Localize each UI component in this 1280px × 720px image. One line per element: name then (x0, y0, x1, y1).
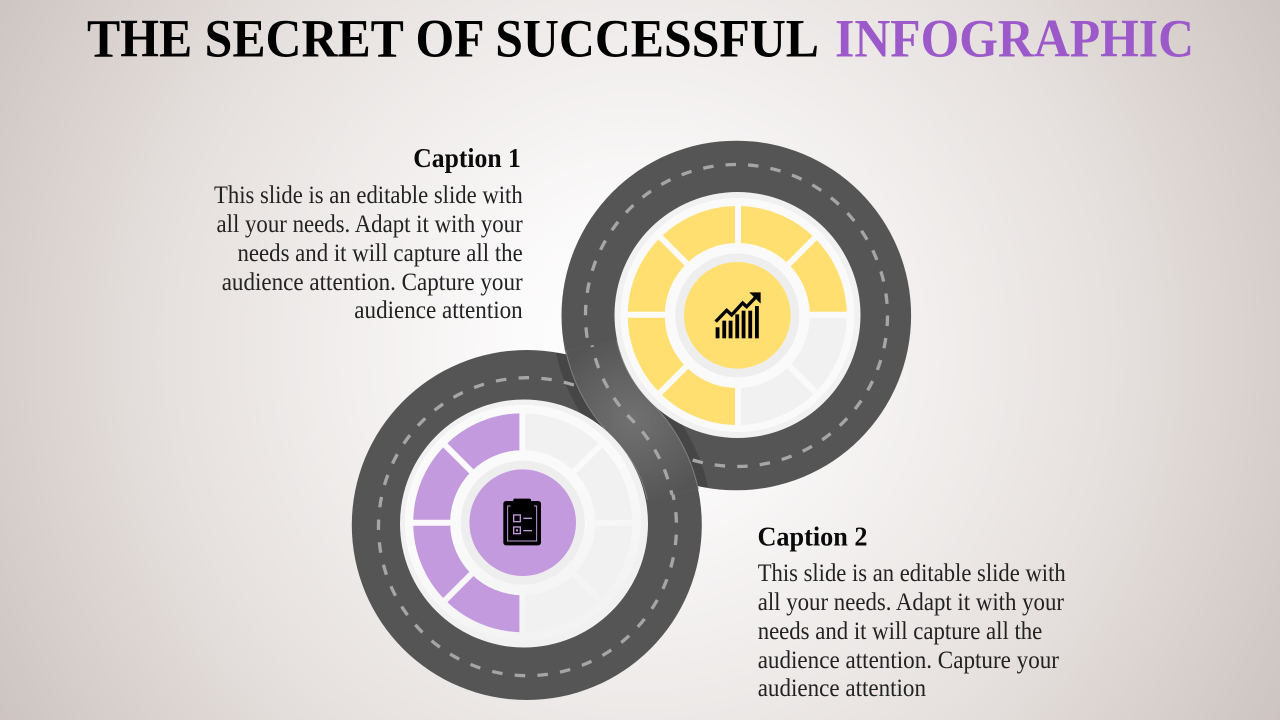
caption 1 heading: Caption 1 (413, 143, 521, 173)
empty segments (504, 413, 655, 655)
caption 1 body: audience attention (354, 297, 523, 324)
top disc (614, 192, 860, 438)
caption 1 body: audience attention. Capture your (222, 269, 523, 296)
empty segments (719, 316, 847, 448)
caption 2 body: audience attention (758, 675, 926, 702)
caption 1 text block (214, 143, 523, 324)
panel: bottom gauge (391, 391, 655, 655)
caption 2 body: audience attention. Capture your (758, 647, 1060, 674)
yellow segments (605, 183, 869, 425)
purple segments (391, 391, 541, 632)
top ring lane dashes (586, 164, 888, 466)
S connector lane dashes (592, 345, 672, 495)
panel: top gauge (605, 183, 869, 448)
bottom road ring (352, 350, 702, 700)
caption 2 body: This slide is an editable slide with (758, 560, 1066, 587)
bottom ring lane dashes (378, 378, 676, 676)
caption 2 body: all your needs. Adapt it with your (758, 589, 1065, 616)
caption 2 heading: Caption 2 (758, 522, 868, 552)
icon: clipboard checklist (503, 499, 541, 545)
caption 1 body: needs and it will capture all the (238, 240, 523, 267)
caption 1 body: all your needs. Adapt it with your (216, 211, 523, 238)
caption 1 body: This slide is an editable slide with (214, 182, 523, 209)
S connector road (591, 346, 673, 494)
S connector road edge (591, 346, 673, 494)
caption 2 body: needs and it will capture all the (758, 618, 1042, 645)
caption 2 text block (758, 522, 1066, 702)
title: INFOGRAPHIC (835, 8, 1194, 68)
top road ring (562, 141, 911, 490)
caption 1 body (214, 182, 523, 324)
yellow hub (684, 262, 791, 369)
connector shadow (591, 346, 673, 494)
title: THE SECRET OF SUCCESSFUL (87, 8, 819, 68)
bottom disc (400, 400, 648, 648)
icon: rising bar chart (716, 292, 761, 338)
purple hub (469, 469, 576, 576)
caption 2 body (758, 560, 1066, 702)
road graphic (352, 141, 911, 700)
